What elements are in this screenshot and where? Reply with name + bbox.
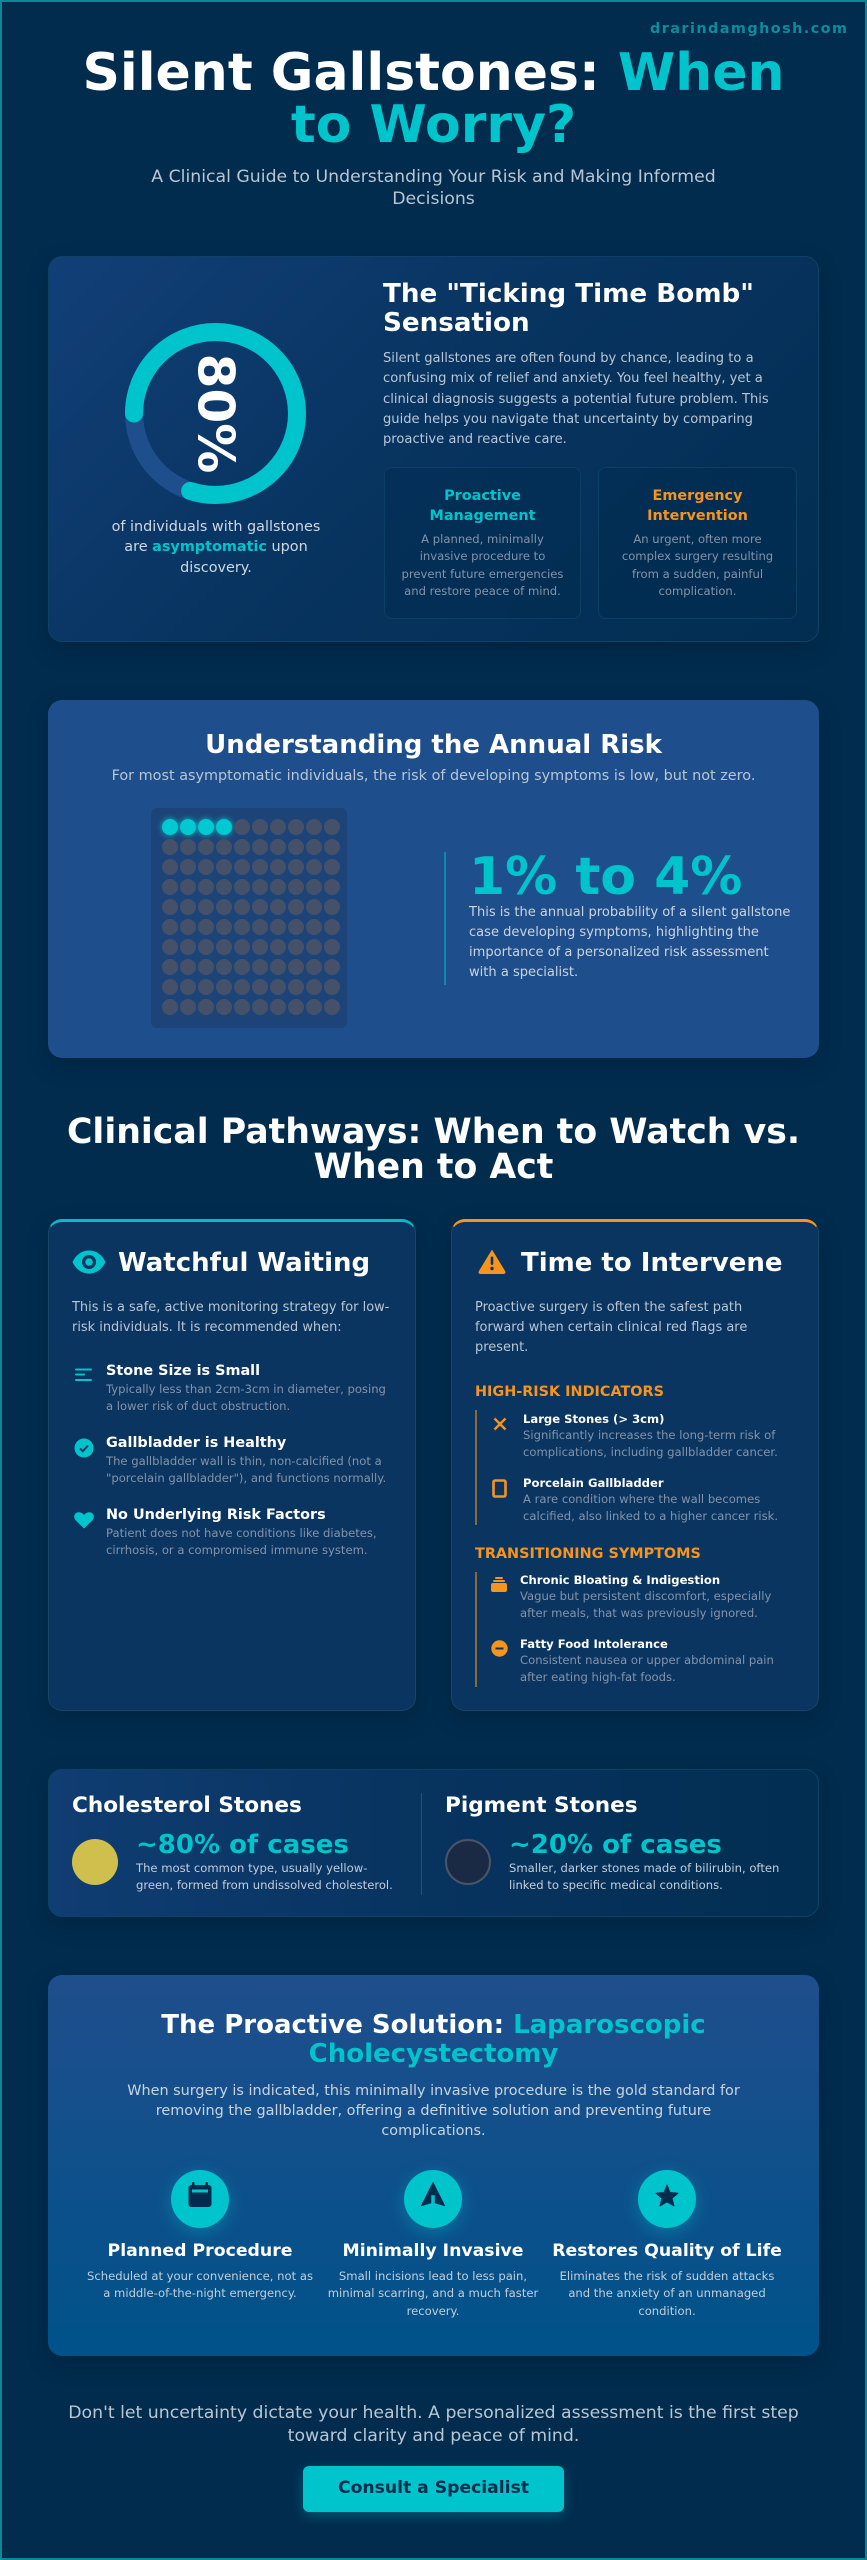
- item text: [520, 1589, 771, 1620]
- feature text: Eliminates the risk of sudden attacks: [560, 2269, 774, 2283]
- heading: Sensation: [383, 308, 530, 338]
- group: symptom list: [475, 1572, 807, 1687]
- description: green, formed from undissolved cholesterol.: [136, 1878, 393, 1892]
- item: no risk factors: [106, 1507, 377, 1557]
- item title: Chronic Bloating & Indigestion: [520, 1573, 720, 1587]
- icon: calendar: [171, 2170, 229, 2228]
- subheading: For most asymptomatic individuals, the risk of developing symptoms is low, but not zero.: [112, 768, 755, 784]
- heading: [383, 279, 754, 338]
- subtitle: Decisions: [392, 189, 475, 209]
- item text: [106, 1382, 386, 1413]
- card text: A planned, minimally: [421, 532, 544, 546]
- section heading: clinical pathways: Clinical Pathways: When to Watch vs.: [67, 1112, 800, 1152]
- group: high-risk list: [475, 1410, 807, 1525]
- item title: Porcelain Gallbladder: [523, 1476, 664, 1490]
- divider: [421, 1793, 422, 1895]
- description: Smaller, darker stones made of bilirubin, often: [509, 1861, 779, 1875]
- donut caption: are asymptomatic upon: [124, 539, 308, 555]
- item text: Significantly increases the long-term risk of: [523, 1428, 775, 1442]
- feature text: minimal scarring, and a much faster: [328, 2286, 538, 2300]
- title: Silent Gallstones: When: [82, 43, 785, 103]
- card title: [647, 488, 748, 524]
- stat: 80 percent: ~80% of cases: [136, 1830, 349, 1860]
- icon: heart: [74, 1512, 94, 1528]
- feature title: Planned Procedure: [108, 2241, 292, 2261]
- intro text: Proactive surgery is often the safest path: [475, 1300, 742, 1314]
- heading: Understanding the Annual Risk: [205, 730, 662, 760]
- section heading: clinical pathways: [67, 1112, 800, 1186]
- section heading: clinical pathways: When to Act: [314, 1146, 553, 1186]
- card text: [622, 532, 773, 598]
- panel: ticking time bomb: [48, 256, 819, 642]
- item text: cirrhosis, or a compromised immune system.: [106, 1543, 368, 1557]
- item text: Typically less than 2cm-3cm in diameter, posing: [106, 1382, 386, 1396]
- title: [82, 43, 785, 155]
- item text: Patient does not have conditions like diabetes,: [106, 1526, 377, 1540]
- card title: [430, 488, 536, 524]
- statistic text: [468, 904, 790, 980]
- card title: Intervention: [647, 508, 748, 524]
- website url: drarindamghosh.com: [650, 21, 848, 37]
- description: [509, 1861, 779, 1892]
- icon: stacked layers: [491, 1577, 507, 1592]
- item: large stones: [523, 1412, 778, 1459]
- description: [136, 1861, 393, 1892]
- item text: a lower risk of duct obstruction.: [106, 1399, 290, 1413]
- panel: time to intervene: [451, 1219, 819, 1711]
- body text: complications.: [381, 2123, 486, 2139]
- subheading: high-risk indicators: HIGH-RISK INDICATORS: [475, 1384, 664, 1400]
- statistic text: with a specialist.: [469, 965, 578, 980]
- heading: Watchful Waiting: [118, 1248, 370, 1278]
- icon: warning triangle: [478, 1250, 506, 1274]
- body text: removing the gallbladder, offering a definitive solution and preventing future: [156, 2103, 711, 2119]
- panel: watchful waiting: [48, 1219, 416, 1711]
- feature: quality of life: [545, 2233, 789, 2323]
- item text: The gallbladder wall is thin, non-calcified (not a: [106, 1454, 382, 1468]
- donut caption: of individuals with gallstones: [112, 519, 320, 535]
- item title: Gallbladder is Healthy: [106, 1435, 286, 1451]
- body text: confusing mix of relief and anxiety. You feel healthy, yet a: [383, 371, 763, 386]
- description: linked to specific medical conditions.: [509, 1878, 723, 1892]
- feature title: Restores Quality of Life: [552, 2241, 782, 2261]
- item title: Large Stones (> 3cm): [523, 1412, 664, 1426]
- body text: [383, 351, 769, 447]
- title: to Worry?: [291, 95, 576, 155]
- stat: 20 percent: ~20% of cases: [509, 1830, 722, 1860]
- item text: A rare condition where the wall becomes: [523, 1492, 760, 1506]
- subtitle: A Clinical Guide to Understanding Your Risk and Making Informed: [151, 166, 716, 186]
- intro text: [475, 1300, 747, 1355]
- body text: Silent gallstones are often found by chance, leading to a: [383, 351, 754, 366]
- icon: eye: [72, 1250, 106, 1274]
- feature: minimally invasive: [311, 2233, 555, 2323]
- card: emergency intervention: [598, 467, 797, 619]
- item text: [106, 1526, 377, 1557]
- donut chart: 80 percent: 80%: [186, 354, 244, 473]
- body text: proactive and reactive care.: [383, 432, 567, 447]
- call to action button: [303, 2466, 564, 2512]
- item text: [523, 1492, 778, 1523]
- intro text: present.: [475, 1340, 528, 1355]
- item: fatty food: [520, 1637, 774, 1684]
- dot grid: 4 of 100: [151, 808, 347, 1028]
- item text: [106, 1454, 386, 1485]
- call to action button: Consult a Specialist: [338, 2478, 529, 2498]
- heading: The "Ticking Time Bomb": [383, 279, 754, 309]
- card title: Proactive: [444, 488, 521, 504]
- icon: yellow stone: [72, 1839, 118, 1885]
- feature text: [311, 2268, 555, 2320]
- card text: complex surgery resulting: [622, 549, 773, 563]
- feature text: condition.: [638, 2304, 696, 2318]
- donut chart: 80 percent: [125, 323, 306, 504]
- body text: When surgery is indicated, this minimally invasive procedure is the gold standard for: [127, 2083, 740, 2099]
- item text: [520, 1652, 774, 1684]
- feature text: Small incisions lead to less pain,: [339, 2269, 527, 2283]
- donut caption: discovery.: [180, 560, 252, 576]
- body text: guide helps you navigate that uncertainty by comparing: [383, 412, 753, 427]
- donut caption: [112, 519, 320, 576]
- card text: An urgent, often more: [633, 532, 762, 546]
- feature text: a middle-of-the-night emergency.: [103, 2286, 297, 2300]
- intro text: risk individuals. It is recommended when:: [72, 1320, 342, 1335]
- description: The most common type, usually yellow-: [136, 1861, 367, 1875]
- item title: Stone Size is Small: [106, 1363, 260, 1379]
- card title: Management: [430, 508, 535, 524]
- card title: Emergency: [653, 488, 742, 504]
- heading: pigment stones: Pigment Stones: [445, 1793, 638, 1818]
- item: porcelain gallbladder: [523, 1476, 778, 1523]
- risk statistic block: [444, 852, 806, 985]
- intro text: [72, 1300, 389, 1335]
- feature text: [545, 2268, 789, 2320]
- card text: invasive procedure to: [420, 549, 545, 563]
- item text: Vague but persistent discomfort, especially: [520, 1589, 771, 1603]
- card: proactive management: [384, 467, 581, 619]
- item text: Consistent nausea or upper abdominal pain: [520, 1652, 774, 1666]
- item text: after meals, that was previously ignored.: [520, 1606, 758, 1620]
- subheading: transitioning symptoms: TRANSITIONING SYMPTOMS: [475, 1546, 701, 1562]
- heading: [161, 2010, 706, 2068]
- icon: rectangle: [492, 1479, 507, 1498]
- icon: check circle: [74, 1438, 94, 1458]
- footer text: toward clarity and peace of mind.: [288, 2426, 579, 2446]
- feature text: recovery.: [407, 2304, 459, 2318]
- icon: navigation arrow: [404, 2170, 462, 2228]
- heading: Time to Intervene: [521, 1248, 783, 1278]
- item: stone size: [106, 1363, 386, 1413]
- footer text: Don't let uncertainty dictate your health. A personalized assessment is the first step: [68, 2402, 799, 2422]
- item text: "porcelain gallbladder"), and functions normally.: [106, 1471, 386, 1485]
- body text: [48, 2081, 819, 2142]
- item: healthy gallbladder: [106, 1435, 386, 1485]
- item title: No Underlying Risk Factors: [106, 1507, 326, 1523]
- heading: cholesterol stones: Cholesterol Stones: [72, 1793, 302, 1818]
- statistic text: case developing symptoms, highlighting the: [469, 925, 759, 940]
- item title: Fatty Food Intolerance: [520, 1637, 668, 1651]
- feature title: Minimally Invasive: [342, 2241, 524, 2261]
- feature text: [78, 2268, 322, 2303]
- card text: complication.: [659, 584, 736, 598]
- statistic text: This is the annual probability of a silent gallstone: [469, 904, 790, 920]
- icon: dark stone: [445, 1839, 491, 1885]
- intro text: forward when certain clinical red flags are: [475, 1320, 747, 1335]
- item: bloating: [520, 1573, 771, 1620]
- footer text: [0, 2402, 867, 2448]
- item text: complications, including gallbladder cancer.: [523, 1445, 778, 1459]
- icon: minus circle: [491, 1640, 508, 1657]
- icon: size lines: [75, 1368, 92, 1381]
- icon: star: [638, 2170, 696, 2228]
- card text: prevent future emergencies: [402, 567, 563, 581]
- body text: clinical diagnosis suggests a potential future problem. This: [383, 392, 769, 406]
- item text: after eating high-fat foods.: [520, 1670, 676, 1684]
- feature: planned procedure: [78, 2233, 322, 2323]
- item text: [523, 1428, 778, 1459]
- statistic: 1% to 4%: [469, 847, 742, 907]
- statistic text: importance of a personalized risk assessment: [469, 945, 769, 960]
- panel: annual risk: [48, 700, 819, 1058]
- feature text: and the anxiety of an unmanaged: [568, 2286, 766, 2300]
- card text: from a sudden, painful: [632, 567, 763, 581]
- subtitle: [151, 166, 716, 209]
- item text: calcified, also linked to a higher cancer risk.: [523, 1509, 778, 1523]
- intro text: This is a safe, active monitoring strategy for low-: [72, 1300, 389, 1315]
- heading: Cholecystectomy: [309, 2038, 558, 2068]
- icon: cross: [494, 1418, 506, 1430]
- feature text: Scheduled at your convenience, not as: [87, 2269, 313, 2283]
- panel: proactive solution: [48, 1975, 819, 2356]
- panel: stone types: [48, 1769, 819, 1917]
- card text: [402, 532, 563, 598]
- card text: and restore peace of mind.: [404, 584, 561, 598]
- heading: The Proactive Solution: Laparoscopic: [161, 2010, 706, 2040]
